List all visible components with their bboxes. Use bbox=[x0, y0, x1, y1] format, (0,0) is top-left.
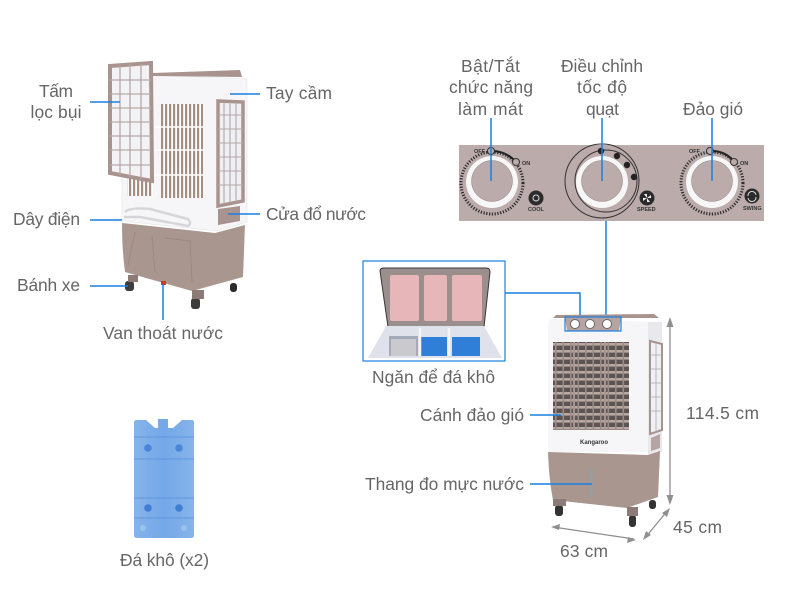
knob: cool bbox=[461, 148, 530, 214]
front grille bbox=[553, 342, 629, 430]
leader lines for front view bbox=[530, 415, 592, 484]
product: front view of air cooler bbox=[548, 314, 662, 527]
label: ice pack: Đá khô (x2) bbox=[120, 550, 209, 570]
knob: cool: OFF bbox=[474, 149, 486, 155]
label: water level gauge: Thang đo mực nước bbox=[365, 474, 524, 494]
knob: speed bbox=[565, 144, 639, 218]
side filter bbox=[218, 101, 243, 206]
label: dust filter bbox=[30, 81, 82, 122]
dimension arrow: width bbox=[551, 524, 636, 543]
label: swing: Đảo gió bbox=[683, 99, 743, 119]
knob: swing bbox=[681, 148, 748, 214]
label: dust filter: Tấm bbox=[39, 81, 73, 101]
dust filter panel bbox=[110, 63, 152, 181]
rear grille bbox=[127, 104, 203, 198]
water inlet door bbox=[218, 206, 240, 225]
tank base bbox=[548, 451, 660, 508]
icon: ice pack bbox=[134, 419, 194, 538]
wheels bbox=[125, 275, 237, 309]
body bbox=[548, 319, 662, 452]
labels: control functions: Bật/Tắt bbox=[461, 56, 520, 76]
drain valve bbox=[161, 281, 166, 285]
leader lines for controls bbox=[491, 118, 712, 317]
icon: speed bbox=[637, 190, 656, 213]
wheels bbox=[553, 499, 656, 527]
knob: cool: ON bbox=[522, 161, 530, 167]
label: fan speed: Điều chỉnh bbox=[561, 56, 643, 76]
brand: Kangaroo bbox=[580, 440, 608, 446]
labels: control functions: chức năng bbox=[449, 77, 533, 97]
label: fan speed bbox=[561, 56, 643, 119]
knob: swing: ON bbox=[740, 161, 748, 167]
power cord and handle bbox=[124, 208, 190, 226]
panel: ice compartment photo bbox=[363, 261, 505, 361]
compartment tray bbox=[368, 326, 502, 358]
labels: control functions bbox=[449, 56, 533, 119]
leader lines for rear view bbox=[90, 94, 260, 320]
label: power cord: Dây điện bbox=[13, 209, 80, 229]
water door bbox=[651, 434, 660, 451]
labels: control functions: làm mát bbox=[458, 99, 523, 119]
icon: cool: COOL bbox=[528, 207, 545, 213]
tank base bbox=[122, 223, 245, 291]
side shade bbox=[648, 322, 662, 455]
lid bbox=[553, 314, 659, 318]
label: fan speed: tốc độ bbox=[577, 77, 627, 97]
label: swing louvers: Cánh đảo gió bbox=[420, 405, 524, 425]
icon: swing bbox=[743, 188, 762, 212]
open lid bbox=[380, 268, 490, 327]
label: ice compartment: Ngăn để đá khô bbox=[372, 367, 495, 387]
label: wheels: Bánh xe bbox=[17, 275, 80, 295]
label: width: 63 cm bbox=[560, 541, 608, 561]
label: handle: Tay cầm bbox=[266, 83, 332, 103]
water gauge bbox=[590, 469, 592, 497]
control strip bbox=[565, 317, 621, 331]
side filter bbox=[650, 341, 662, 434]
dimension arrow: height bbox=[666, 317, 674, 505]
icon: speed: SPEED bbox=[637, 207, 656, 213]
label: water inlet: Cửa đổ nước bbox=[266, 204, 366, 224]
label: height: 114.5 cm bbox=[686, 403, 759, 423]
label: depth: 45 cm bbox=[673, 517, 722, 537]
icon: cool bbox=[528, 190, 545, 213]
product: rear view of air cooler bbox=[110, 63, 247, 309]
label: drain valve: Van thoát nước bbox=[103, 323, 223, 343]
panel: control knobs bbox=[459, 144, 764, 221]
dimension arrow: depth bbox=[643, 508, 670, 540]
label: dust filter: lọc bụi bbox=[30, 102, 82, 122]
top lid bbox=[153, 70, 242, 77]
knob: swing: OFF bbox=[689, 149, 701, 155]
rear body bbox=[122, 75, 247, 231]
leader line: compartment to machine bbox=[505, 293, 580, 317]
label: fan speed: quạt bbox=[586, 99, 619, 119]
icon: swing: SWING bbox=[743, 206, 762, 212]
